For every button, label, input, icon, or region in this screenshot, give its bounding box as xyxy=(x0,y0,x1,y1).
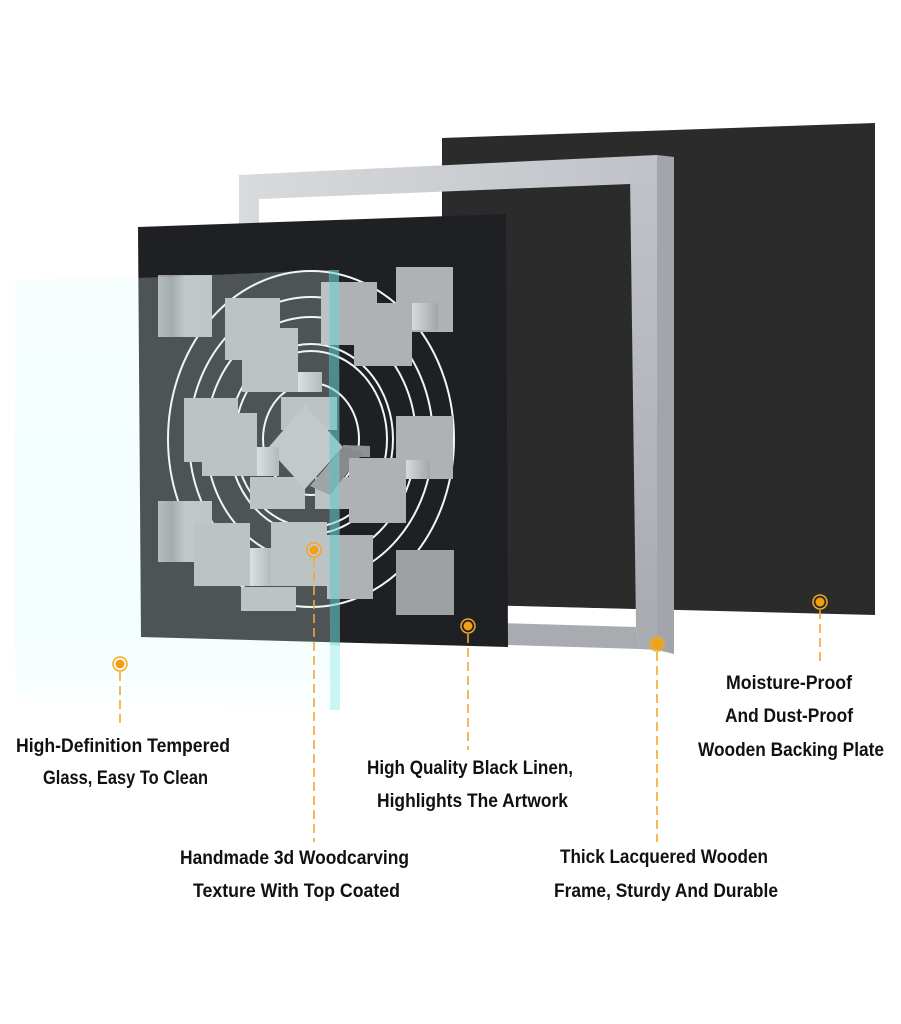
callout: handmade woodcarving: Handmade 3d Woodcarving xyxy=(180,847,409,869)
callout: handmade woodcarving: Texture With Top Coated xyxy=(193,880,400,902)
callout: lacquered frame: Thick Lacquered Wooden xyxy=(560,846,768,868)
backing plate xyxy=(442,123,875,615)
callout: handmade woodcarving xyxy=(180,543,409,902)
black linen artwork panel xyxy=(138,214,508,647)
callout: black linen: Highlights The Artwork xyxy=(377,790,568,812)
concentric carved rings xyxy=(168,271,454,607)
glass reflection over panel xyxy=(138,270,330,643)
glass pane: pale tint outside the artwork xyxy=(15,270,340,710)
callout: lacquered frame: Frame, Sturdy And Durable xyxy=(554,880,778,902)
woodcarving squares xyxy=(158,267,454,615)
callout: tempered glass: High-Definition Tempered xyxy=(16,735,230,757)
lacquered frame xyxy=(239,155,674,654)
callout: tempered glass: Glass, Easy To Clean xyxy=(43,767,208,789)
glass edge below the panel xyxy=(330,645,340,710)
callout: backing plate xyxy=(698,595,884,761)
glass edge: teal strip xyxy=(329,270,340,646)
callout: black linen: High Quality Black Linen, xyxy=(367,757,573,779)
callout: black linen xyxy=(367,619,573,812)
callout: tempered glass xyxy=(16,657,230,789)
callout: lacquered frame xyxy=(554,636,778,902)
callout: backing plate: And Dust-Proof xyxy=(725,705,853,727)
callout: backing plate: Moisture-Proof xyxy=(726,672,852,694)
